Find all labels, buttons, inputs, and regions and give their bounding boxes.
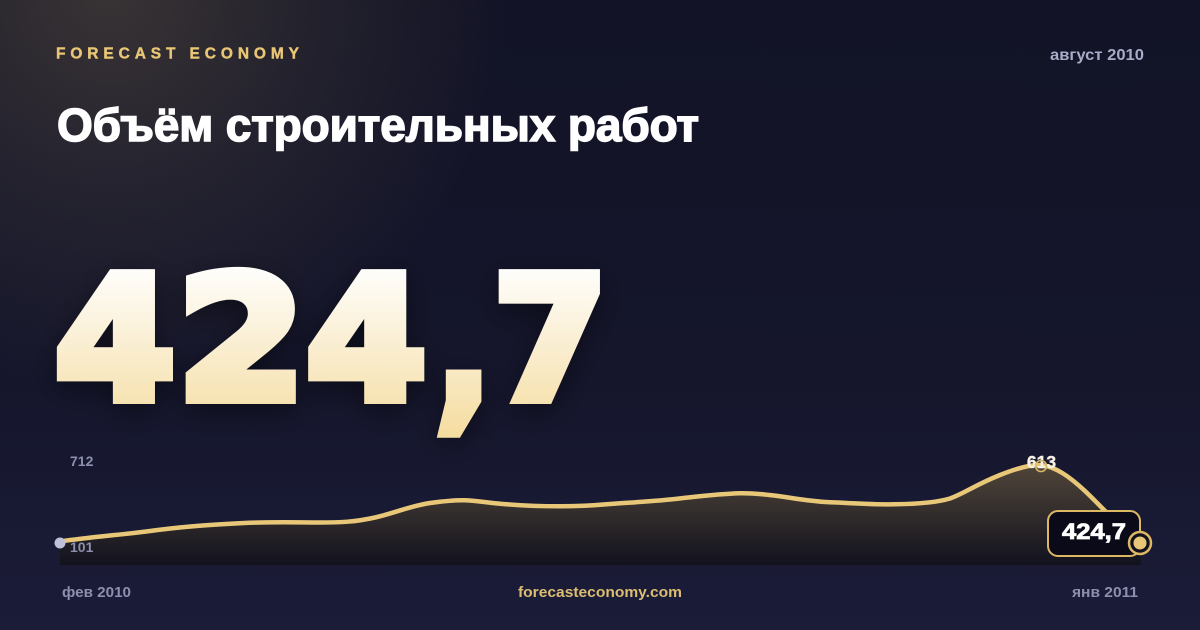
- big value: [55, 237, 608, 452]
- big value: 7: [493, 242, 608, 439]
- start date label: фев 2010: [62, 585, 131, 601]
- axis max label: 712: [70, 453, 94, 469]
- current value callout: [1048, 511, 1140, 556]
- start marker: [54, 538, 66, 548]
- end date label: янв 2011: [1072, 585, 1138, 601]
- big value: ,: [432, 237, 495, 452]
- peak value label: 613: [1027, 452, 1056, 472]
- big value: 4: [306, 242, 427, 439]
- chart line: [60, 465, 1140, 543]
- date label: август 2010: [1050, 47, 1144, 64]
- source url: forecasteconomy.com: [518, 585, 682, 601]
- big value: 2: [177, 241, 306, 439]
- big value: 4: [55, 242, 175, 439]
- chart area fill: [60, 465, 1141, 565]
- brand label: FORECAST ECONOMY: [56, 46, 300, 62]
- current value marker: [1129, 532, 1151, 554]
- axis min label: 101: [70, 539, 94, 555]
- title: Объём строительных работ: [57, 99, 699, 151]
- peak marker: [1036, 460, 1046, 472]
- chart: [54, 452, 1151, 565]
- current value callout: 424,7: [1062, 519, 1126, 544]
